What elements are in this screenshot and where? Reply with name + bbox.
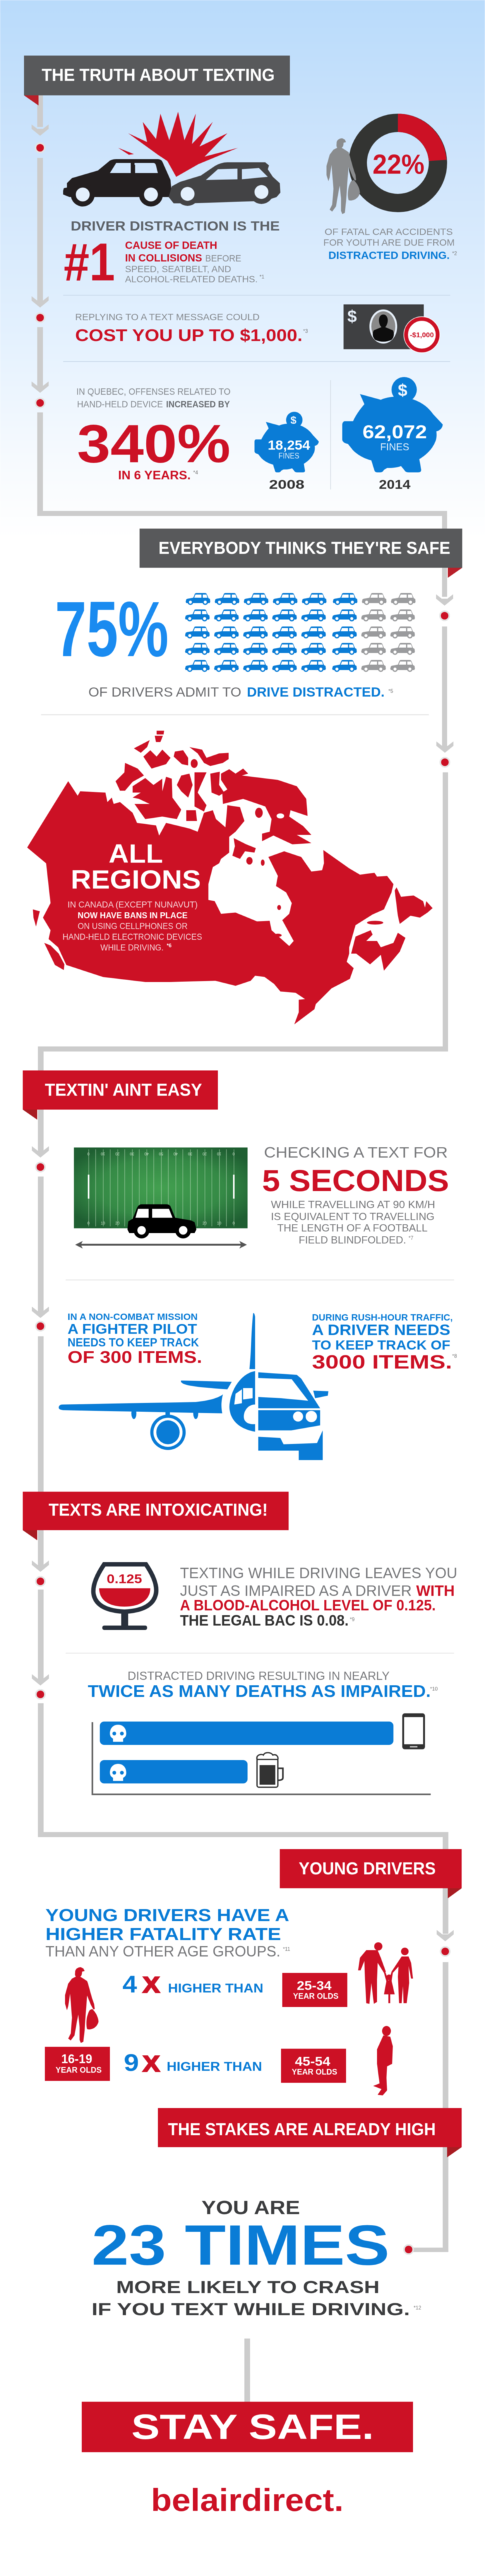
icon: half plane half car <box>59 1313 328 1460</box>
bar chart: deaths comparison <box>92 1713 431 1795</box>
box: 25-34 year olds: 25-34 <box>297 1979 332 1993</box>
heading ribbon: TEXTIN' AINT EASY <box>45 1080 202 1099</box>
text block: Quebec offenses 340%: INCREASED BY <box>166 399 230 410</box>
driver distraction statement: DRIVER DISTRACTION IS THE <box>71 219 280 234</box>
panel: the stakes are already high <box>82 2108 462 2518</box>
icon: phone <box>402 1713 425 1749</box>
illustration: football field with car: 10 <box>217 1151 221 1155</box>
box: 45-54 year olds: YEAR OLDS <box>292 2067 337 2076</box>
illustration: football field with car <box>74 1147 248 1249</box>
map: Canada <box>27 731 433 1024</box>
icon: family <box>358 1943 413 2004</box>
chart: piggy bank 2014 <box>342 377 443 492</box>
chart heading: twice as many deaths <box>88 1670 438 1701</box>
caption: admit to driving distracted: DRIVE DISTRACTED. <box>247 685 385 700</box>
heading ribbon: EVERYBODY THINKS THEY'RE SAFE <box>159 538 450 558</box>
text block: blood alcohol: JUST AS IMPAIRED AS A DRIVER <box>180 1583 412 1600</box>
text block: driver in traffic: DURING RUSH-HOUR TRAFFIC, <box>312 1312 453 1323</box>
text block: higher fatality rate <box>45 1905 290 1960</box>
text block: 23 times: MORE LIKELY TO CRASH <box>116 2277 380 2297</box>
text block: higher fatality rate: *11 <box>283 1946 290 1952</box>
icon: young person <box>65 1967 99 2043</box>
heading ribbon: THE STAKES ARE ALREADY HIGH <box>168 2119 436 2139</box>
map text: all regions: ALL <box>109 839 163 868</box>
chart heading: twice as many deaths: DISTRACTED DRIVING RESULTING IN NEARLY <box>128 1670 390 1682</box>
chart: piggy bank 2008: 18,254 <box>268 438 310 453</box>
text block: higher fatality rate: YOUNG DRIVERS HAVE A <box>45 1905 289 1925</box>
chart: 22% donut with young driver <box>326 114 446 214</box>
illustration: football field with car: 0 <box>87 1222 90 1226</box>
caption: admit to driving distracted: OF DRIVERS ADMIT TO <box>88 685 241 700</box>
chart heading: twice as many deaths: *10 <box>430 1686 438 1692</box>
illustration: football field with car: 0 <box>232 1151 235 1155</box>
comparison: 4x higher <box>123 1972 263 1998</box>
driver distraction statement: SPEED, SEATBELT, AND <box>125 264 231 275</box>
icon: wine glass <box>93 1564 156 1630</box>
chart: piggy bank 2008 <box>254 412 319 492</box>
text block: driver in traffic: A DRIVER NEEDS <box>312 1322 450 1339</box>
box: 45-54 year olds <box>281 2049 346 2083</box>
driver distraction statement: IN COLLISIONS <box>125 253 202 264</box>
chart: piggy bank 2014: $ <box>398 381 407 400</box>
text block: five seconds: CHECKING A TEXT FOR <box>264 1144 448 1161</box>
fatal accidents caption: FOR YOUTH ARE DUE FROM <box>323 237 455 248</box>
chart: piggy bank 2014: 2014 <box>379 478 411 492</box>
text block: cost of replying: *3 <box>303 328 308 334</box>
text block: blood alcohol: TEXTING WHILE DRIVING LEAVES YOU <box>180 1565 457 1582</box>
illustration: football field with car: 10 <box>100 1151 105 1155</box>
text block: 23 times: *12 <box>414 2305 422 2311</box>
illustration: football field with car: 40 <box>173 1151 177 1155</box>
illustration: football field with car: 10 <box>217 1222 222 1226</box>
text block: Quebec offenses 340% <box>76 386 231 482</box>
comparison: 9x higher: 9 <box>124 2050 139 2076</box>
illustration: football field with car: 30 <box>188 1151 192 1155</box>
icon: banknote with fine <box>344 304 440 353</box>
driver distraction statement: CAUSE OF DEATH <box>125 240 217 251</box>
illustration: football field with car: 0 <box>87 1151 90 1155</box>
illustration: football field with car: 20 <box>203 1222 207 1226</box>
text block: blood alcohol <box>180 1565 457 1629</box>
icon: wine glass: 0.125 <box>107 1573 142 1586</box>
text block: driver in traffic: TO KEEP TRACK OF <box>312 1338 450 1353</box>
chart: piggy bank 2008: FINES <box>278 452 299 460</box>
icon: older person <box>373 2026 393 2095</box>
panel: texts are intoxicating <box>23 1492 457 1795</box>
text block: Quebec offenses 340%: 340% <box>77 414 231 474</box>
text block: five seconds <box>262 1144 449 1246</box>
panel: young drivers <box>45 1849 462 2095</box>
text block: driver in traffic: *8 <box>452 1353 457 1359</box>
driver distraction statement: *1 <box>260 274 265 280</box>
map text: all regions <box>63 839 202 952</box>
chart heading: twice as many deaths: TWICE AS MANY DEATHS AS IMPAIRED. <box>88 1682 431 1701</box>
box: 16-19 year olds: 16-19 <box>61 2052 92 2066</box>
text block: fighter pilot: NEEDS TO KEEP TRACK <box>68 1336 199 1349</box>
heading ribbon <box>23 1492 289 1540</box>
illustration: football field with car: 30 <box>129 1151 134 1155</box>
text block: driver in traffic: 3000 ITEMS. <box>312 1351 452 1373</box>
comparison: 9x higher <box>124 2050 262 2076</box>
text block: higher fatality rate: HIGHER FATALITY RATE <box>45 1924 281 1944</box>
map text: all regions: ON USING CELLPHONES OR <box>78 921 188 931</box>
text block: five seconds: IS EQUIVALENT TO TRAVELLING <box>271 1211 434 1223</box>
map text: all regions: WHILE DRIVING. <box>100 942 164 952</box>
big stat 75%: 75% <box>55 586 169 673</box>
text block: five seconds: THE LENGTH OF A FOOTBALL <box>277 1222 428 1234</box>
box: 16-19 year olds: YEAR OLDS <box>56 2065 102 2075</box>
heading ribbon <box>23 1070 218 1120</box>
illustration: football field with car: 0 <box>232 1222 235 1226</box>
text block: five seconds: 5 SECONDS <box>262 1165 449 1198</box>
heading ribbon <box>158 2108 462 2157</box>
heading ribbon <box>140 529 462 578</box>
illustration: football field with car: 10 <box>101 1222 105 1226</box>
heading ribbon <box>24 56 290 105</box>
comparison: 4x higher: HIGHER THAN <box>168 1982 263 1996</box>
text block: Quebec offenses 340%: HAND-HELD DEVICE <box>77 399 163 410</box>
icon: banknote with fine: -$1,000 <box>410 332 434 339</box>
text block: blood alcohol: THE LEGAL BAC IS 0.08. <box>180 1612 349 1629</box>
bar: impaired <box>100 1760 248 1783</box>
heading ribbon <box>280 1849 462 1898</box>
text block: five seconds: FIELD BLINDFOLDED. <box>299 1234 406 1246</box>
connector timeline <box>32 95 453 2402</box>
comparison: 4x higher: X <box>143 1973 160 1998</box>
box: 25-34 year olds <box>282 1973 347 2007</box>
background gradient <box>0 0 485 537</box>
icon array: cars <box>185 593 416 672</box>
illustration: football field with car: 50 <box>159 1151 163 1155</box>
driver distraction statement: ALCOHOL-RELATED DEATHS. <box>125 274 258 285</box>
map text: all regions: *6 <box>167 943 172 949</box>
map text: all regions: NOW HAVE BANS IN PLACE <box>78 910 188 920</box>
driver distraction statement: BEFORE <box>205 253 241 264</box>
text block: five seconds: WHILE TRAVELLING AT 90 KM/H <box>271 1199 435 1211</box>
text block: blood alcohol: *9 <box>350 1617 355 1622</box>
text block: fighter pilot: OF 300 ITEMS. <box>68 1348 202 1367</box>
caption: admit to driving distracted <box>88 685 393 700</box>
map text: all regions: HAND-HELD ELECTRONIC DEVICES <box>63 932 202 942</box>
icon: banknote with fine: $ <box>347 307 357 326</box>
text block: cost of replying: COST YOU UP TO $1,000. <box>75 326 302 345</box>
bar: texting <box>100 1722 393 1745</box>
illustration: football field with car: 40 <box>144 1151 148 1155</box>
chart: 22% donut with young driver: 22% <box>373 149 424 180</box>
fatal accidents caption: *2 <box>452 251 457 256</box>
comparison: 9x higher: HIGHER THAN <box>167 2060 262 2074</box>
illustration: football field with car: 20 <box>115 1151 119 1155</box>
box: 16-19 year olds <box>45 2047 110 2081</box>
chart: piggy bank 2014: 62,072 <box>362 422 427 443</box>
illustration: football field with car: 20 <box>202 1151 207 1155</box>
text block: Quebec offenses 340%: *4 <box>193 470 198 476</box>
icon: beer mug <box>257 1752 283 1787</box>
banner: stay safe <box>82 2402 413 2452</box>
text block: 23 times: YOU ARE <box>201 2196 300 2219</box>
icon: car crash <box>63 112 280 207</box>
text block: fighter pilot <box>68 1312 202 1367</box>
text block: 23 times <box>92 2196 422 2319</box>
text block: blood alcohol: A BLOOD-ALCOHOL LEVEL OF 0.125. <box>180 1597 436 1614</box>
panel: textin' aint easy <box>23 1070 457 1460</box>
map text: all regions: IN CANADA (EXCEPT NUNAVUT) <box>68 899 198 909</box>
heading ribbon: THE TRUTH ABOUT TEXTING <box>42 65 275 85</box>
box: 25-34 year olds: YEAR OLDS <box>293 1991 338 2001</box>
heading ribbon: TEXTS ARE INTOXICATING! <box>49 1500 268 1519</box>
panel: the truth about texting <box>24 56 457 492</box>
heading ribbon: YOUNG DRIVERS <box>299 1859 436 1878</box>
text block: Quebec offenses 340%: IN 6 YEARS. <box>118 469 191 482</box>
chart: piggy bank 2008: $ <box>290 414 297 426</box>
text block: higher fatality rate: THAN ANY OTHER AGE GROUPS. <box>45 1943 280 1960</box>
text block: fighter pilot: A FIGHTER PILOT <box>68 1321 198 1337</box>
logo: belairdirect: belairdirect. <box>151 2483 344 2518</box>
text block: 23 times: 23 TIMES <box>92 2214 390 2277</box>
box: 45-54 year olds: 45-54 <box>295 2055 331 2069</box>
chart: piggy bank 2008: 2008 <box>269 478 304 492</box>
caption: admit to driving distracted: *5 <box>388 688 393 694</box>
text block: 23 times: IF YOU TEXT WHILE DRIVING. <box>92 2299 410 2319</box>
text block: five seconds: *7 <box>409 1235 414 1241</box>
map text: all regions: REGIONS <box>71 865 201 894</box>
text block: cost of replying <box>75 312 308 345</box>
fatal accidents caption: DISTRACTED DRIVING. <box>328 249 450 261</box>
comparison: 9x higher: X <box>143 2052 160 2076</box>
text block: cost of replying: REPLYING TO A TEXT MESSAGE COULD <box>75 312 260 323</box>
chart: piggy bank 2014: FINES <box>380 442 409 453</box>
fatal accidents caption <box>323 227 457 261</box>
arrow: field length <box>75 1241 247 1249</box>
text block: fighter pilot: IN A NON-COMBAT MISSION <box>68 1312 198 1322</box>
fatal accidents caption: OF FATAL CAR ACCIDENTS <box>325 227 453 237</box>
banner: stay safe: STAY SAFE. <box>131 2407 374 2447</box>
driver distraction statement <box>64 219 280 292</box>
comparison: 4x higher: 4 <box>123 1972 137 1998</box>
panel: everybody thinks they're safe <box>27 529 462 1024</box>
text block: driver in traffic <box>312 1312 457 1373</box>
text block: Quebec offenses 340%: IN QUEBEC, OFFENSES RELATED TO <box>76 386 231 397</box>
illustration: football field with car: 20 <box>116 1222 120 1226</box>
driver distraction statement: #1 <box>64 232 115 292</box>
text block: blood alcohol: WITH <box>416 1583 455 1600</box>
